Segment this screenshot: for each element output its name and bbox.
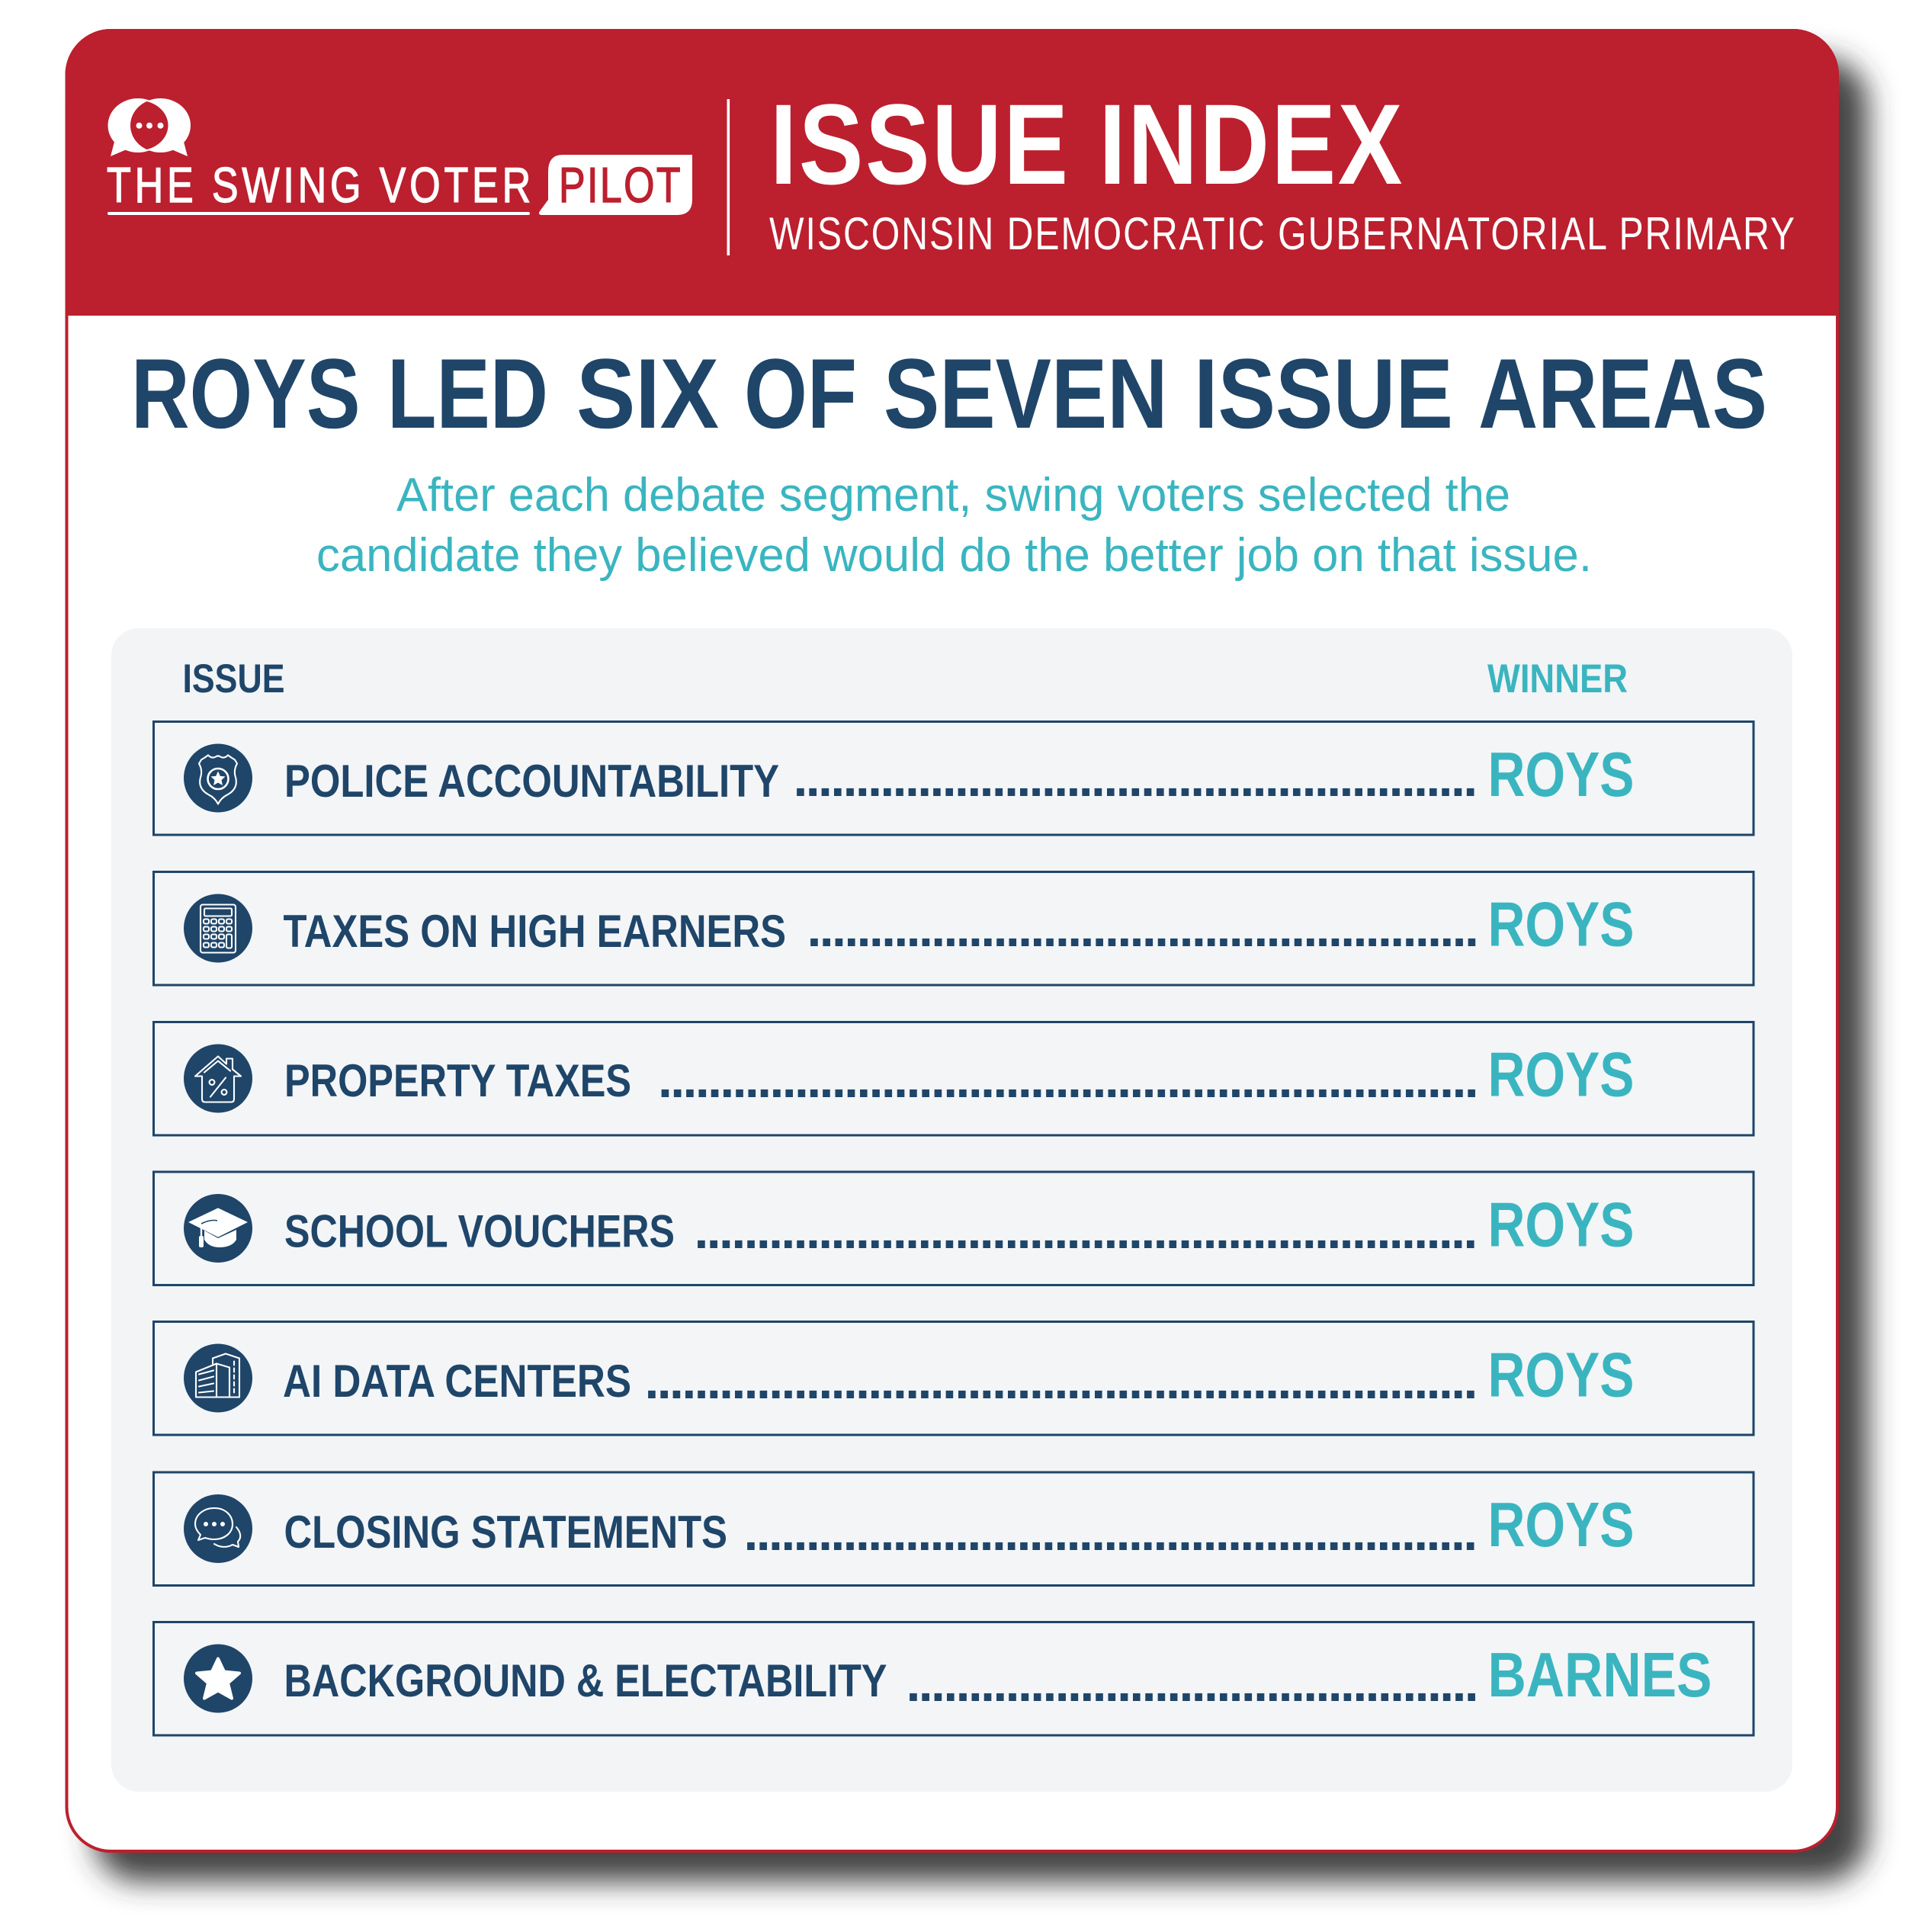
- dot leader: ...............................................................: [694, 1202, 1476, 1260]
- dot leader: ..................................................................: [658, 1051, 1477, 1109]
- issue label: PROPERTY TAXES: [284, 1055, 631, 1106]
- issue label: SCHOOL VOUCHERS: [284, 1206, 675, 1256]
- icon: chat bubbles: [184, 1494, 252, 1563]
- issue label: TAXES ON HIGH EARNERS: [284, 906, 786, 957]
- title: ISSUE INDEX: [770, 80, 1404, 208]
- main headline: ISSUE: [1194, 338, 1453, 449]
- main headline: SIX: [576, 338, 719, 449]
- logo: [107, 98, 692, 215]
- issue label: BACKGROUND & ELECTABILITY: [284, 1655, 887, 1706]
- dot leader: .......................................................: [793, 749, 1476, 807]
- icon: data center buildings: [184, 1343, 252, 1412]
- issue label: POLICE ACCOUNTABILITY: [284, 756, 779, 807]
- row: police accountability: [154, 721, 1754, 835]
- row: background and electability: [154, 1622, 1754, 1735]
- issue label: CLOSING STATEMENTS: [284, 1507, 727, 1558]
- dot leader: ...........................................................: [744, 1504, 1476, 1561]
- icon: graduation cap: [184, 1194, 252, 1263]
- icon: house with percent: [184, 1045, 252, 1113]
- intro text: [316, 469, 1592, 582]
- dot leader: ..............................................: [906, 1654, 1477, 1712]
- row: ai data centers: [154, 1322, 1754, 1435]
- winner: ROYS: [1488, 1038, 1635, 1110]
- icon: police badge: [184, 744, 252, 813]
- header divider: [727, 99, 730, 255]
- icon: calculator: [184, 894, 252, 962]
- main headline: [131, 338, 1767, 449]
- dot leader: ......................................................: [807, 900, 1477, 958]
- column header: winner: WINNER: [1487, 656, 1628, 701]
- main headline: AREAS: [1478, 338, 1767, 449]
- main headline: SEVEN: [884, 338, 1168, 449]
- column header: issue: ISSUE: [183, 656, 285, 701]
- row: closing statements: [154, 1472, 1754, 1586]
- issue label: AI DATA CENTERS: [283, 1356, 631, 1407]
- winner: ROYS: [1488, 1489, 1635, 1560]
- logo underline: [107, 212, 530, 215]
- intro text: After each debate segment, swing voters selected the: [396, 469, 1510, 522]
- main headline: LED: [387, 338, 548, 449]
- row: taxes on high earners: [154, 872, 1754, 985]
- header band: [66, 29, 1839, 316]
- icon: overlapping speech bubbles: [108, 98, 191, 156]
- icon: star: [184, 1644, 252, 1712]
- winner: BARNES: [1488, 1639, 1712, 1710]
- panel: issue table: [111, 628, 1792, 1792]
- main headline: ROYS: [131, 338, 361, 449]
- main headline: OF: [744, 338, 857, 449]
- winner: ROYS: [1488, 889, 1635, 959]
- intro text: candidate they believed would do the better job on that issue.: [316, 529, 1592, 582]
- row: property taxes: [154, 1022, 1754, 1135]
- logo wordmark: THE SWING VOTER: [107, 157, 534, 213]
- winner: ROYS: [1488, 1189, 1635, 1260]
- winner: ROYS: [1488, 739, 1635, 810]
- dot leader: ...................................................................: [645, 1352, 1476, 1410]
- row: school vouchers: [154, 1172, 1754, 1285]
- logo pilot badge: PILOT: [559, 157, 682, 213]
- winner: ROYS: [1488, 1339, 1635, 1410]
